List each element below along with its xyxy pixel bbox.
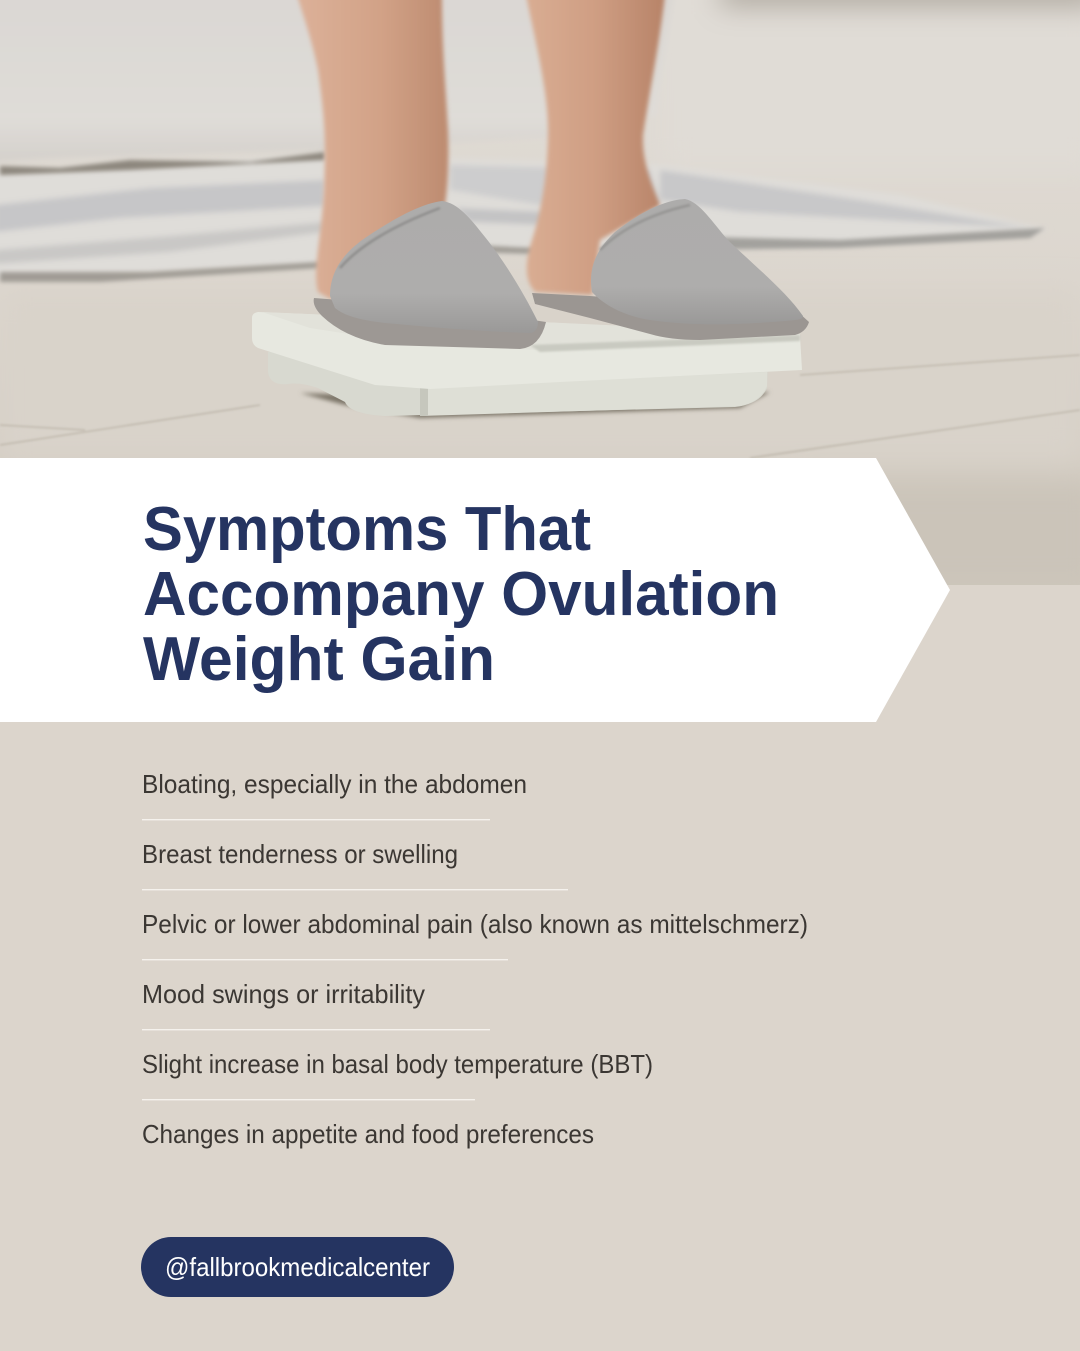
photo background: floor seams xyxy=(0,355,1080,458)
icon: left slipper xyxy=(314,201,546,349)
handle text: @fallbrookmedicalcenter xyxy=(165,1252,430,1282)
photo background: rug and sofa shadows xyxy=(0,152,1045,282)
banner shape xyxy=(0,458,950,722)
scale base xyxy=(322,388,766,416)
symptom: basal body temperature: Slight increase in basal body temperature (BBT) xyxy=(142,1049,653,1079)
scale top highlight xyxy=(530,335,800,352)
scale shadow xyxy=(300,392,770,418)
symptom: pelvic pain: Pelvic or lower abdominal pain (also known as mittelschmerz) xyxy=(142,909,808,939)
photo: feet in slippers on a bathroom scale xyxy=(0,0,1080,590)
social handle pill xyxy=(141,1237,454,1297)
title banner: white arrow shape xyxy=(0,458,950,722)
heading: Accompany Ovulation xyxy=(143,560,779,629)
symptom list xyxy=(142,769,808,1149)
photo background: floor xyxy=(0,0,1080,585)
left slipper sole xyxy=(314,298,546,349)
icon: left leg xyxy=(297,0,448,300)
symptom: breast tenderness: Breast tenderness or swelling xyxy=(142,839,458,869)
right slipper upper xyxy=(591,199,803,324)
pill background xyxy=(141,1237,454,1297)
right slipper sole xyxy=(532,293,809,340)
heading xyxy=(143,495,779,694)
scale top plate xyxy=(252,312,802,389)
icon: right leg xyxy=(526,0,665,295)
icon: right slipper xyxy=(532,199,809,340)
heading: Weight Gain xyxy=(143,625,495,694)
heading: Symptoms That xyxy=(143,495,591,564)
scale xyxy=(252,312,802,418)
photo background: striped rug xyxy=(0,165,998,272)
photo background: wall at top right xyxy=(710,0,1080,514)
left slipper upper xyxy=(330,201,538,333)
symptom: mood swings: Mood swings or irritability xyxy=(142,979,425,1009)
symptom: appetite: Changes in appetite and food preferences xyxy=(142,1119,594,1149)
symptom: bloating: Bloating, especially in the abdomen xyxy=(142,769,527,799)
photo background: sofa xyxy=(0,150,106,158)
